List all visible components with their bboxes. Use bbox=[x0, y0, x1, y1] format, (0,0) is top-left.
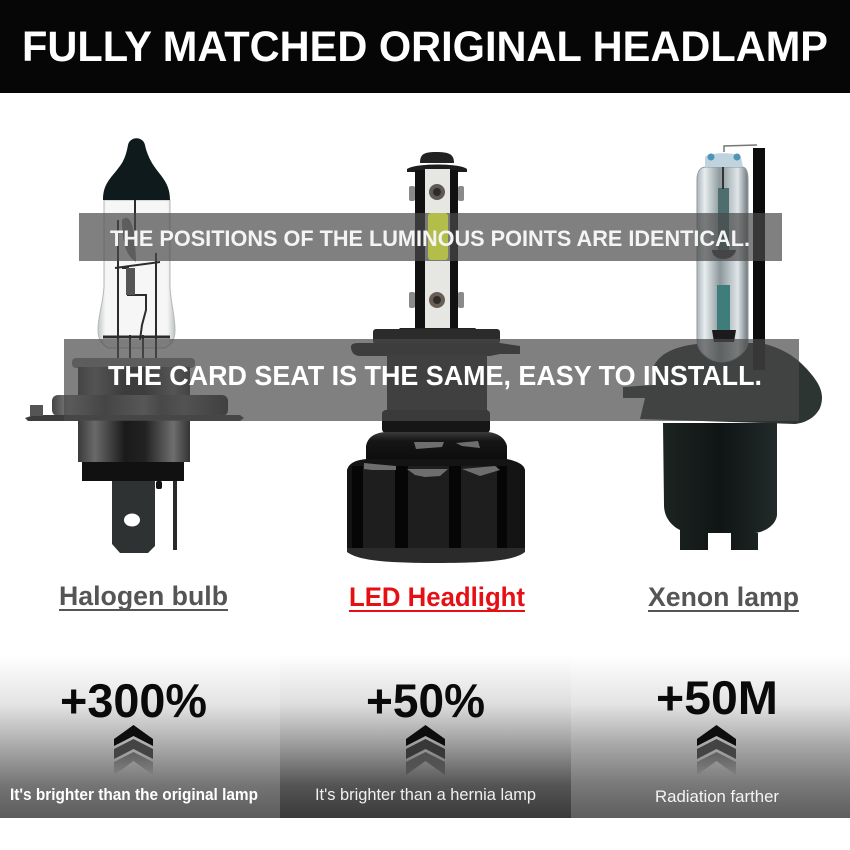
panel: LED comparison bbox=[280, 655, 571, 818]
LED top cap bbox=[420, 152, 454, 163]
bulb: halogen bbox=[25, 138, 244, 553]
stat: +50M: +50M bbox=[656, 671, 778, 724]
xenon base bbox=[623, 343, 822, 424]
LED posts bbox=[415, 170, 458, 328]
halogen glass envelope bbox=[98, 200, 175, 348]
xenon glass tube bbox=[697, 167, 748, 362]
bulb: LED headlight bbox=[347, 152, 525, 563]
label: xenon lamp: Xenon lamp bbox=[648, 582, 799, 612]
stat: +50%: +50% bbox=[366, 674, 485, 727]
bulb: xenon bbox=[623, 145, 822, 550]
caption: brighter than original: It's brighter than the original lamp bbox=[10, 786, 258, 804]
xenon return wire bbox=[753, 148, 765, 370]
icon: up chevrons bbox=[406, 725, 445, 775]
halogen blade terminal bbox=[112, 481, 155, 553]
LED chip bbox=[428, 213, 448, 260]
title banner bbox=[0, 0, 850, 93]
label: halogen bulb: Halogen bulb bbox=[59, 581, 228, 611]
panel: halogen comparison bbox=[0, 655, 280, 818]
xenon top cap bbox=[705, 153, 743, 167]
LED fins bbox=[363, 466, 497, 548]
stat: +300%: +300% bbox=[60, 674, 207, 727]
caption: brighter than hernia: It's brighter than a hernia lamp bbox=[315, 786, 536, 804]
LED screws bbox=[429, 184, 445, 200]
banner: card seat: THE CARD SEAT IS THE SAME, EASY TO INSTALL. bbox=[108, 360, 762, 391]
halogen base bbox=[72, 358, 195, 368]
title banner: FULLY MATCHED ORIGINAL HEADLAMP bbox=[22, 23, 828, 71]
xenon body bbox=[663, 423, 777, 550]
halogen filament wires bbox=[103, 200, 170, 358]
icon: up chevrons bbox=[114, 725, 153, 775]
LED collar and flange bbox=[396, 328, 480, 332]
xenon arc capsule bbox=[718, 188, 729, 250]
label: LED headlight: LED Headlight bbox=[349, 582, 525, 612]
banner: luminous points: THE POSITIONS OF THE LUMINOUS POINTS ARE IDENTICAL. bbox=[110, 226, 750, 251]
halogen black tip bbox=[103, 138, 170, 200]
LED heat sink bbox=[366, 432, 507, 461]
caption: radiation farther: Radiation farther bbox=[655, 788, 779, 806]
banner: card seat bbox=[64, 339, 799, 421]
panel: xenon comparison bbox=[571, 655, 850, 818]
banner: luminous points bbox=[79, 213, 782, 261]
icon: up chevrons bbox=[697, 725, 736, 775]
